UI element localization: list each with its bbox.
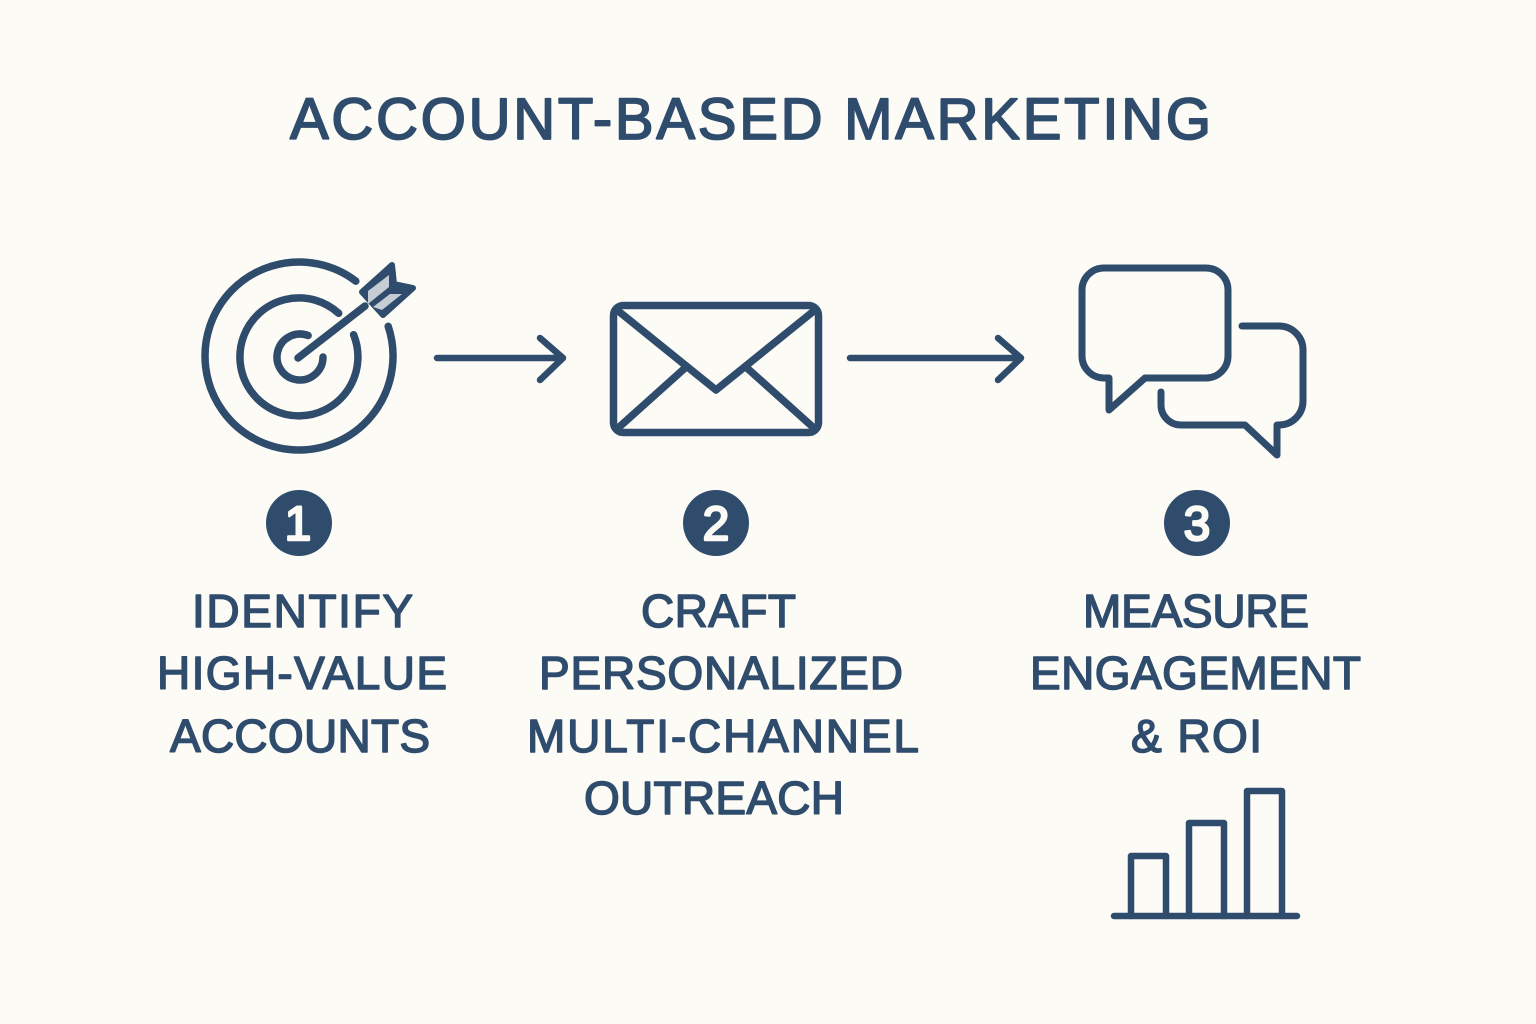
title: ACCOUNT-BASED MARKETING bbox=[290, 87, 1211, 152]
step 3 label: & ROI bbox=[1131, 710, 1262, 762]
icon: speech bubbles bbox=[1082, 268, 1303, 455]
step 2 label: CRAFT bbox=[641, 585, 796, 637]
step 1 number badge: 1 bbox=[285, 498, 311, 551]
step 3 label: MEASURE bbox=[1083, 585, 1309, 637]
step 1 number badge bbox=[266, 490, 332, 556]
step 2 label: PERSONALIZED bbox=[539, 647, 903, 699]
step 3 label bbox=[1030, 585, 1361, 762]
step 1 label: IDENTIFY bbox=[192, 585, 413, 637]
icon: bar chart bbox=[1114, 791, 1297, 916]
step 2 label: MULTI-CHANNEL bbox=[527, 710, 919, 762]
icon: target with arrow bbox=[205, 262, 413, 450]
step 2 number badge bbox=[683, 490, 749, 556]
arrow: step 1 to step 2 bbox=[437, 338, 563, 380]
step 3 number badge: 3 bbox=[1184, 498, 1210, 551]
step 1 label: HIGH-VALUE bbox=[157, 647, 447, 699]
step 2 label bbox=[527, 585, 919, 824]
icon: envelope bbox=[614, 306, 818, 432]
arrow: step 2 to step 3 bbox=[850, 338, 1021, 380]
step 2 number badge: 2 bbox=[703, 498, 729, 551]
step 1 label bbox=[157, 585, 447, 762]
step 1 label: ACCOUNTS bbox=[170, 710, 430, 762]
step 3 number badge bbox=[1164, 490, 1230, 556]
step 2 label: OUTREACH bbox=[584, 772, 844, 824]
step 3 label: ENGAGEMENT bbox=[1030, 647, 1361, 699]
